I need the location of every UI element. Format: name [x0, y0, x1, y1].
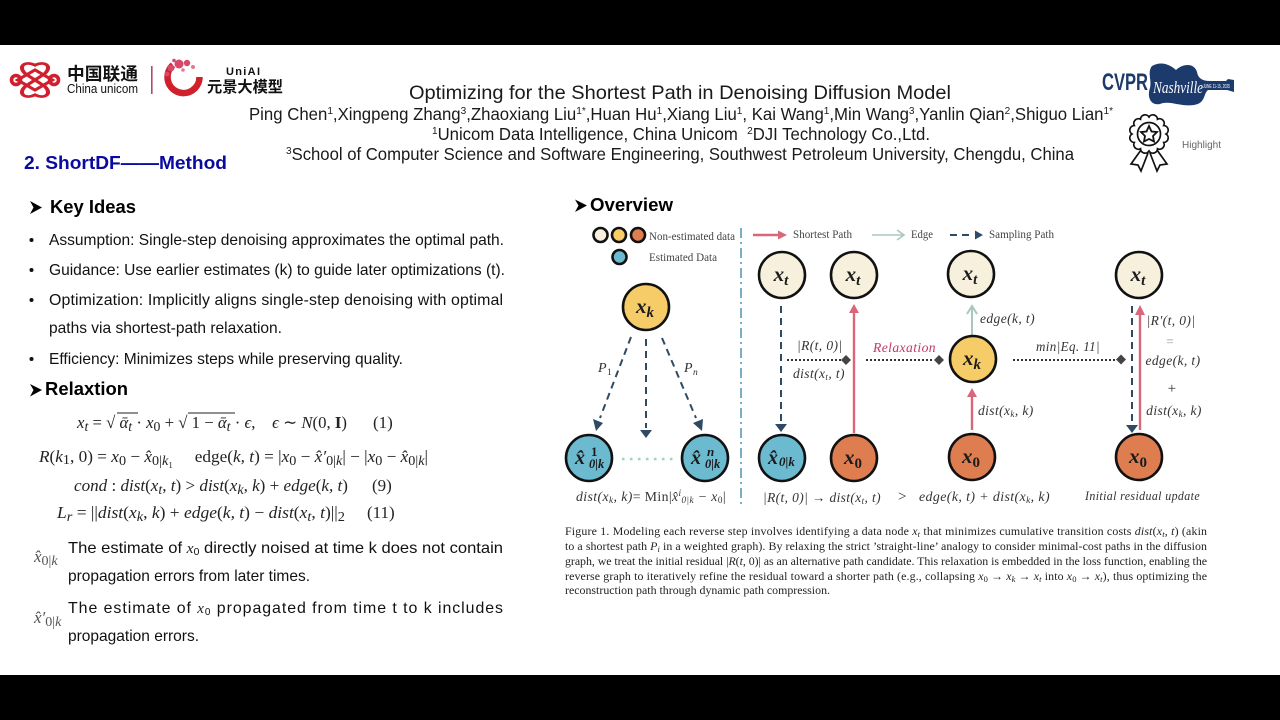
node: x_t: [948, 251, 994, 297]
equation 11: k) + edge(k, t) − dist(x: [152, 503, 307, 522]
figure caption: →: [1015, 569, 1034, 583]
equation 11: = ||: [72, 503, 98, 522]
figure caption: x: [1005, 569, 1012, 583]
formula: dist: = Min|x̂: [633, 489, 678, 504]
figure caption: →: [988, 569, 1006, 583]
equation residual and edge: 0|k₁: [152, 454, 173, 469]
node: x_k: [950, 336, 996, 382]
title block: 1*: [1103, 105, 1113, 117]
title block: School of Computer Science and Software Engineering, Southwest Petroleum University, Chengdu, China: [292, 144, 1074, 164]
node: estimate n: n: [707, 444, 714, 459]
formula: residual to dist: t: [862, 496, 865, 506]
node: estimate: [759, 435, 805, 481]
title block: ,Xiang Liu: [662, 104, 737, 124]
label: updated residual equation: +: [1168, 381, 1176, 397]
icon: guitar: [1149, 63, 1234, 105]
bullet list: [30, 232, 505, 368]
equation 11: L: [56, 503, 67, 522]
bullet list: Efficiency: Minimizes steps while preserving quality.: [49, 351, 403, 368]
title block: 2: [747, 125, 753, 137]
note: direct estimate: [33, 540, 503, 585]
node: x_t: [1116, 252, 1162, 298]
equation residual and edge: x̂: [400, 447, 409, 466]
node: x_t: x: [1131, 262, 1141, 286]
equation 11: 2: [338, 510, 345, 525]
heading: key ideas: Key Ideas: [50, 197, 136, 217]
equation residual and edge: −: [382, 447, 401, 466]
arrow: shortest path: [849, 304, 859, 433]
equation residual and edge: | − |: [342, 447, 368, 466]
bullet list: Guidance: Use earlier estimates (k) to guide later optimizations (t).: [49, 262, 505, 279]
figure caption: k: [1012, 574, 1016, 584]
equation 11: ,: [311, 503, 320, 522]
equation 1: + √ 1 −: [160, 413, 218, 432]
node: x_k: x: [963, 346, 974, 370]
equation 9: [74, 476, 392, 498]
label: updated residual equation: , k): [1183, 403, 1202, 418]
equation 11: t: [307, 510, 313, 525]
panel: relaxation: [30, 379, 428, 525]
figure caption: →: [1077, 569, 1095, 583]
formula: residual to dist: , t): [865, 490, 881, 505]
formula: dist: 0: [718, 495, 723, 505]
equation 11: (11): [367, 503, 395, 522]
node: x_t: x: [774, 262, 784, 286]
equation residual and edge: −: [126, 447, 144, 466]
figure caption: t: [1100, 574, 1103, 584]
note: direct estimate: directly noised at time k does not contain: [199, 540, 503, 557]
legend: paths: [753, 229, 1054, 241]
equation residual and edge: 0: [119, 454, 126, 469]
figure caption: to a shortest path P: [565, 539, 657, 553]
guitar date: JUNE 11-15, 2025: [1203, 84, 1230, 90]
icon: highlight medal: [1130, 115, 1168, 171]
node: x_t direct: [831, 252, 877, 298]
labels: P1 and Pn: [597, 361, 698, 378]
node: estimate n: 0|k: [705, 457, 721, 471]
panel: key ideas: [30, 197, 505, 368]
labels: P1 and Pn: P: [598, 361, 607, 376]
equation 1: t: [227, 420, 232, 435]
title block: Unicom Data Intelligence, China Unicom: [438, 124, 747, 144]
label: residual: dist(x: [793, 366, 825, 381]
formula: inequality: edge(k, t) + dist(x: [919, 489, 1023, 504]
figure caption: x: [1094, 569, 1101, 583]
node: x_t: t: [973, 272, 978, 288]
title block: , Kai Wang: [742, 104, 824, 124]
figure caption: Figure 1. Modeling each reverse step involves identifying a data node x: [565, 524, 918, 538]
formula: residual to dist: |R(t, 0)| → dist(x: [763, 490, 862, 505]
formula: inequality: , k): [1031, 489, 1050, 504]
equation residual and edge: 0|k: [408, 454, 424, 469]
node: x_0: [1116, 434, 1162, 480]
node: x_t: [759, 252, 805, 298]
logo text: China Unicom: [67, 64, 139, 96]
figure caption: x: [1066, 569, 1073, 583]
figure caption: 0: [984, 574, 988, 584]
equation 1: ϵ, ϵ ∼ N(0, I): [244, 413, 347, 432]
heading: relaxation: Relaxtion: [45, 379, 128, 399]
equation 1: ·: [132, 413, 146, 432]
equation 1: ·: [231, 413, 244, 432]
node: estimate 1: x̂: [574, 447, 585, 469]
label: dist: k: [1010, 409, 1015, 419]
legend: paths: Shortest Path: [793, 229, 852, 241]
figure caption: t: [1039, 574, 1042, 584]
node: estimate 1: 1: [591, 444, 598, 459]
heading: overview: Overview: [590, 195, 674, 215]
panel: initial residual: [759, 252, 881, 506]
equation 11: r: [67, 510, 73, 525]
logo divider: [151, 66, 153, 94]
figure caption: t) (akin: [1171, 524, 1207, 538]
panel: estimates from x_k: [566, 284, 728, 505]
equation 9: ,: [244, 476, 252, 495]
title block: 3: [909, 105, 915, 117]
title block: ,Xingpeng Zhang: [333, 104, 461, 124]
min connector: min|Eq. 11|: [1036, 339, 1100, 354]
title block: ,Zhaoxiang Liu: [466, 104, 576, 124]
formula: dist: 0|k: [682, 495, 695, 505]
icon: Unicom knot: [12, 63, 58, 97]
node: x_0: [949, 434, 995, 480]
equation 1: (1): [373, 413, 393, 432]
equation 1: [76, 413, 393, 435]
label: updated residual equation: dist(x: [1146, 403, 1179, 418]
title block: 1: [432, 125, 438, 137]
arrow: shortest path: [1135, 305, 1145, 430]
relaxation label and connector: Relaxation: [872, 340, 936, 355]
divider: [740, 228, 742, 505]
figure caption: i: [658, 544, 661, 554]
formula: dist: − x: [694, 489, 718, 504]
node: x_0: x: [844, 445, 854, 469]
label: dist: , k): [1015, 403, 1034, 418]
note: direct estimate: 0: [194, 547, 200, 558]
arrow: edge: [967, 306, 977, 335]
title block: Ping Chen: [249, 104, 331, 124]
figure caption: dist(x: [1135, 524, 1162, 538]
node: x_t: t: [784, 273, 789, 289]
node: x_0: x: [1129, 444, 1140, 468]
equation 9: k) + edge(k, t): [252, 476, 348, 495]
icon: UniAI ring: [165, 59, 200, 93]
connector: teal dots: [622, 458, 676, 460]
equation residual and edge: 0: [375, 454, 382, 469]
figure caption: reverse graph to iteratively refine the residual toward a shorter path (e.g., collapsing x: [565, 569, 984, 583]
note: propagated estimate: [33, 600, 503, 645]
figure caption: t: [1162, 529, 1165, 539]
node: estimate: x̂: [767, 447, 778, 469]
note: propagated estimate: propagation errors.: [68, 628, 199, 645]
relaxation label and connector: [866, 340, 944, 365]
title block: DJI Technology Co.,Ltd.: [753, 124, 930, 144]
figure caption: [565, 524, 1207, 597]
title block: Optimizing for the Shortest Path in Denoising Diffusion Model: [409, 82, 951, 104]
CVPR wordmark: CVPR: [1102, 69, 1148, 96]
node: x_t direct: x: [846, 262, 856, 286]
node: x_k: k: [646, 305, 654, 321]
top black bar: [0, 0, 1280, 45]
label: updated residual equation: edge(k, t): [1146, 353, 1201, 368]
equation residual and edge: |: [425, 447, 428, 466]
legend: paths: Edge: [911, 229, 933, 241]
equation 9: t) > dist(x: [171, 476, 237, 495]
node: x_k: k: [974, 357, 982, 373]
title block: [249, 82, 1113, 164]
equation 9: k: [237, 483, 244, 498]
node: x_0: 0: [972, 455, 980, 471]
equation residual and edge: 0|k: [326, 454, 342, 469]
node: x_t: x: [963, 261, 973, 285]
title block: 1: [737, 105, 743, 117]
figure caption: graph, we treat the initial residual |R(t, 0)| as an alternative path candidate. This relaxation is embedded in the loss function, enabling the: [565, 554, 1207, 568]
node: x_0: [831, 435, 877, 481]
label: residual: |R(t, 0)|: [797, 338, 843, 353]
node: estimate: 0|k: [779, 454, 795, 469]
figure caption: into: [1042, 569, 1067, 583]
equation residual and edge: x: [110, 447, 119, 466]
figure caption: in a weighted graph). By relaxing the strict ’straight-line’ analogy to consider minimal-cost paths in the diffusion: [660, 539, 1207, 553]
equation residual and edge: 1: [63, 453, 70, 468]
diagram: overview figure: [566, 228, 1202, 506]
equation 11: [56, 503, 395, 525]
title block: ,Min Wang: [829, 104, 909, 124]
equation residual and edge: −: [296, 447, 315, 466]
equation 1: ᾱ: [218, 413, 228, 432]
equation residual and edge: x: [367, 447, 376, 466]
figure caption: ), thus optimizing the: [1103, 569, 1207, 583]
arrow: sampling path: [775, 306, 787, 432]
bullet list: Assumption: Single-step denoising approximates the optimal path.: [49, 232, 504, 249]
note: propagated estimate: The estimate of x: [68, 600, 204, 617]
legend: paths: Sampling Path: [989, 229, 1054, 241]
equation residual and edge: edge(: [173, 447, 233, 466]
equation 11: t)||: [320, 503, 337, 522]
node: estimate n: x̂: [690, 447, 701, 469]
title block: 1: [657, 105, 662, 117]
title block: 2: [1005, 105, 1010, 117]
formula: dist: i: [679, 488, 682, 498]
note: propagated estimate: propagated from time t to k includes: [211, 600, 503, 617]
figure caption: t: [918, 529, 921, 539]
note: propagated estimate: x̂′: [33, 608, 46, 627]
label: dist: dist(x: [978, 403, 1010, 418]
labels: P1 and Pn: P: [684, 361, 693, 376]
equation 1: = √: [88, 413, 119, 432]
title block: ,Shiguo Lian: [1010, 104, 1103, 124]
note: direct estimate: x̂: [33, 547, 42, 566]
node: x_0: 0: [854, 456, 862, 472]
label: updated residual equation: k: [1179, 409, 1184, 419]
formula: inequality: [898, 489, 1050, 505]
label: updated residual equation: =: [1165, 334, 1175, 349]
figure caption: that minimizes cumulative transition costs: [920, 524, 1135, 538]
formula: inequality: >: [898, 489, 907, 505]
node: estimate 1: [566, 435, 612, 481]
title block: ,Yanlin Qian: [915, 104, 1005, 124]
labels: P1 and Pn: n: [693, 368, 698, 378]
logo: UniAI: [165, 59, 283, 96]
bullet list: Optimization: Implicitly aligns single-step denoising with optimal: [49, 292, 503, 309]
legend: data types: Non-estimated data: [649, 231, 735, 243]
figure caption: reconstruction path through dynamic path compression.: [565, 583, 830, 597]
figure caption: x: [1033, 569, 1040, 583]
panel: updated residual: [1084, 252, 1202, 503]
label: edge: edge(k, t): [980, 311, 1035, 326]
logo text: China Unicom: 中国联通: [67, 64, 139, 84]
node: estimate n: [682, 435, 728, 481]
panel: relaxed path: [898, 251, 1050, 505]
label: initial residual update: Initial residual update: [1084, 489, 1200, 503]
bottom black bar: [0, 675, 1280, 720]
equation 9: (9): [372, 476, 392, 495]
equation 1: t: [128, 420, 133, 435]
equation residual and edge: R(k: [39, 447, 63, 466]
logo text: China Unicom: China unicom: [67, 82, 138, 96]
arrows: sampling paths: [593, 337, 703, 438]
equation 1: t: [84, 420, 89, 435]
equation 1: 0: [154, 420, 160, 435]
logo text: UniAI: UniAI: [226, 66, 260, 78]
guitar script: Nashville: Nashville: [1152, 78, 1203, 97]
logo: China Unicom: [12, 63, 139, 97]
title block: ,Huan Hu: [586, 104, 657, 124]
note: propagated estimate: 0|k: [45, 615, 61, 630]
node: x_t: t: [1141, 273, 1146, 289]
equation residual and edge: k, t) = |x: [233, 447, 289, 466]
node: x_k: [623, 284, 669, 330]
node: x_0: 0: [1140, 455, 1147, 471]
node: x_t direct: t: [856, 273, 861, 289]
arrow: shortest path: [967, 388, 977, 430]
title block: 1: [824, 105, 830, 117]
note: propagated estimate: 0: [205, 607, 211, 618]
bullet list: paths via shortest-path relaxation.: [49, 320, 282, 337]
legend: data types: Estimated Data: [649, 252, 717, 264]
logo text: UniAI: 元景大模型: [207, 78, 283, 96]
note: direct estimate: The estimate of x: [68, 540, 193, 557]
formula: dist: , k): [614, 489, 633, 504]
equation residual and edge: 0: [289, 454, 296, 469]
formula: inequality: k: [1026, 495, 1031, 505]
label: updated residual equation: [1146, 313, 1202, 419]
title block: 1*: [576, 105, 586, 117]
arrow: sampling path: [1126, 306, 1138, 433]
logo text: UniAI: [207, 66, 283, 96]
labels: P1 and Pn: 1: [607, 368, 612, 378]
min connector: [1013, 339, 1126, 364]
label: residual: t: [825, 372, 828, 382]
label: residual: [787, 338, 851, 382]
equation 1: x: [145, 413, 154, 432]
equation 11: dist(x: [98, 503, 137, 522]
title block: 3: [286, 145, 292, 157]
title block: 1: [327, 105, 333, 117]
legend: data types: [594, 228, 735, 264]
equation residual and edge: , 0) =: [70, 447, 111, 466]
label: updated residual equation: |R′(t, 0)|: [1147, 313, 1195, 328]
formula: dist: dist(x: [576, 489, 608, 504]
figure caption: ,: [1165, 524, 1171, 538]
formula: dist: |: [723, 489, 726, 504]
equation 11: k: [137, 510, 144, 525]
note: direct estimate: propagation errors from later times.: [68, 568, 310, 585]
highlight label: Highlight: [1182, 139, 1221, 151]
node: x_0: x: [962, 444, 972, 468]
equation 1: x: [76, 413, 85, 432]
equation residual and edge: x̂′: [314, 447, 326, 466]
node: estimate 1: 0|k: [589, 457, 605, 471]
figure caption: 0: [1072, 574, 1076, 584]
equation 9: cond : dist(x: [74, 476, 158, 495]
note: direct estimate: 0|k: [42, 554, 58, 569]
equation residual and edge: x̂: [143, 447, 152, 466]
node: x_k: x: [636, 294, 646, 318]
logo: CVPR Nashville: [1102, 63, 1234, 105]
label: residual: , t): [828, 366, 845, 381]
equation 9: t: [158, 483, 163, 498]
equation 11: ,: [143, 503, 152, 522]
equation 1: ᾱ: [119, 413, 129, 432]
equation 9: ,: [162, 476, 171, 495]
formula: dist: k: [609, 495, 614, 505]
title block: 3: [461, 105, 466, 117]
section heading: 2. ShortDF——Method: [24, 152, 227, 173]
